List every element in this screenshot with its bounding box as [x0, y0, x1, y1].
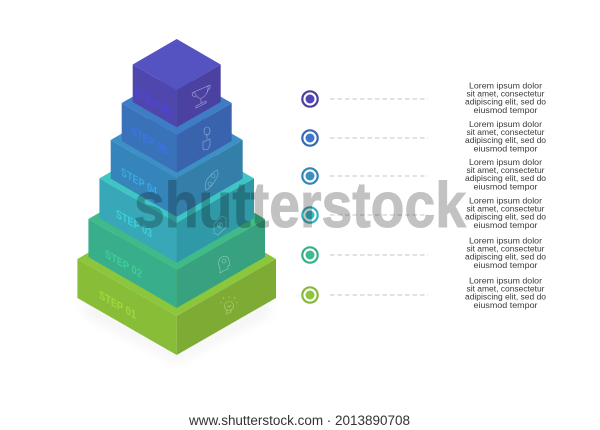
marker 4 — [302, 207, 318, 223]
text block 3: sit amet, consectetur — [466, 166, 545, 175]
text block 6: adipiscing elit, sed do — [465, 293, 547, 302]
icon: plant — [203, 127, 210, 150]
connector 1 — [330, 98, 428, 100]
connector 6 — [330, 294, 428, 296]
text block 1: adipiscing elit, sed do — [465, 98, 547, 107]
text block 5: eiusmod tempor — [474, 261, 538, 270]
watermark: shutterstock — [134, 169, 466, 241]
text block 5 — [465, 236, 547, 270]
icon: rocket — [205, 170, 218, 190]
marker 2 — [302, 130, 318, 146]
text block 5: Lorem ipsum dolor — [469, 236, 542, 246]
text block 2 — [465, 120, 547, 153]
text block 6: Lorem ipsum dolor — [469, 276, 542, 286]
text block 4: eiusmod tempor — [474, 221, 538, 230]
footer credit: www.shutterstock.com · 2013890708 — [188, 413, 410, 428]
text block 4: sit amet, consectetur — [466, 205, 545, 214]
text block 1: Lorem ipsum dolor — [469, 82, 542, 90]
layer 4 — [111, 102, 243, 217]
layer 2 — [88, 168, 265, 308]
text block 2: eiusmod tempor — [474, 144, 538, 153]
text block 3 — [465, 158, 547, 191]
icon: trophy — [192, 85, 210, 108]
connector 5 — [330, 254, 428, 256]
text block 1: eiusmod tempor — [474, 106, 538, 115]
connector 4 — [330, 214, 428, 216]
step 02 label: STEP 02 — [105, 247, 142, 281]
text block 4: adipiscing elit, sed do — [465, 213, 547, 222]
text block 3: eiusmod tempor — [474, 182, 538, 191]
text block 6: eiusmod tempor — [474, 301, 538, 310]
text block 1 — [465, 82, 547, 115]
marker 5 — [302, 247, 318, 263]
marker 1 — [302, 91, 318, 107]
icon: gears — [214, 216, 226, 235]
text block 3: adipiscing elit, sed do — [465, 174, 547, 183]
text block 4 — [465, 196, 547, 230]
layer 3 — [99, 134, 254, 263]
text block 2: adipiscing elit, sed do — [465, 136, 547, 145]
layer 6 — [133, 39, 221, 127]
step 05 label: STEP 05 — [131, 124, 167, 158]
icon: light bulb — [220, 296, 238, 314]
text block 2: Lorem ipsum dolor — [469, 120, 542, 129]
connector 3 — [330, 175, 428, 177]
layer 5 — [122, 72, 232, 173]
step 01 label: STEP 01 — [99, 288, 136, 322]
text block 1: sit amet, consectetur — [466, 90, 545, 99]
text block 3: Lorem ipsum dolor — [469, 158, 542, 167]
marker 3 — [302, 168, 318, 184]
text block 6 — [465, 276, 547, 310]
text block 5: adipiscing elit, sed do — [465, 253, 547, 262]
step 03 label: STEP 03 — [116, 207, 152, 241]
layer 1 — [77, 201, 276, 355]
marker 6 — [302, 287, 318, 303]
text block 2: sit amet, consectetur — [466, 128, 545, 137]
connector 2 — [330, 137, 428, 139]
text block 5: sit amet, consectetur — [466, 245, 545, 254]
text block 6: sit amet, consectetur — [466, 285, 545, 294]
icon: head — [219, 256, 230, 273]
text block 4: Lorem ipsum dolor — [469, 196, 542, 206]
step 04 label: STEP 04 — [121, 165, 157, 199]
step 06 label: STEP 06 — [135, 86, 171, 120]
ground shadow — [84, 302, 270, 362]
pyramid — [77, 39, 276, 355]
